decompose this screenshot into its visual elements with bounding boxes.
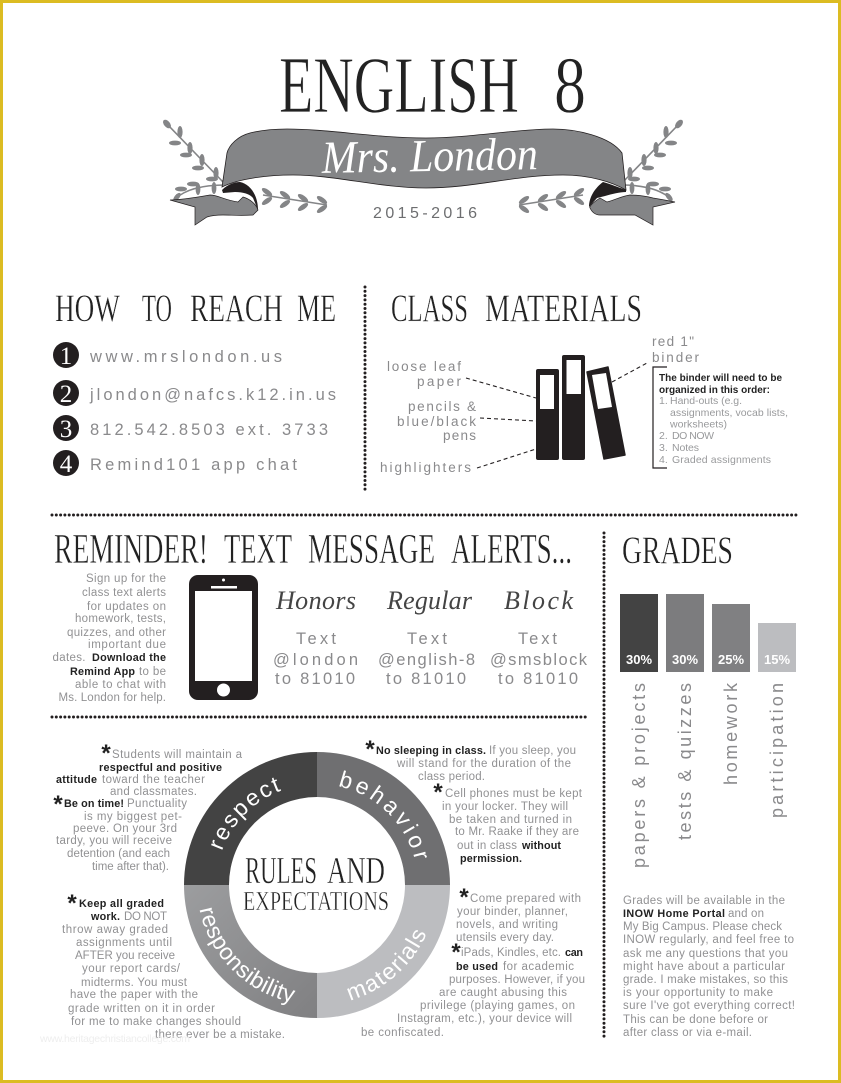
vertical divider between contact and materials <box>364 287 366 493</box>
class: block: @smsblock <box>490 651 588 669</box>
rule: no sleeping: No sleeping in class. <box>376 745 486 757</box>
rule: keep graded work: DO NOT <box>124 911 167 923</box>
rule: keep graded work: your report cards/ <box>82 963 181 975</box>
grades note: is your opportunity to make <box>623 987 773 999</box>
materials labels: paper <box>417 374 462 389</box>
binder organization note: Graded assignments <box>672 454 771 466</box>
rule: devices: Instagram, etc.), your device will <box>397 1013 572 1025</box>
rule: keep graded work: grade written on it in order <box>68 1003 215 1015</box>
watermark: www.heritagechristiancollege.com <box>39 1033 190 1045</box>
rule: respect <box>56 740 243 798</box>
binder organization note: The binder will need to be <box>659 373 782 384</box>
rule: cell phones: permission. <box>460 853 522 865</box>
rule: come prepared: * <box>459 884 469 911</box>
grades note: INOW Home Portal <box>623 908 725 920</box>
rule: keep graded work: AFTER you receive <box>75 950 175 962</box>
bar: papers and projects: 30% <box>626 652 652 667</box>
banner name: Mrs. London <box>320 128 538 183</box>
sign-up paragraph: dates. <box>52 652 86 664</box>
materials labels: red 1" <box>652 334 694 349</box>
heading: how to reach me: ME <box>297 287 336 330</box>
rule: be on time: Be on time! <box>64 798 124 810</box>
rule: come prepared: your binder, planner, <box>457 906 568 918</box>
sign-up paragraph: Sign up for the <box>86 573 166 585</box>
rule: be on time <box>53 791 187 873</box>
heading: text message alerts <box>54 527 572 573</box>
rule: keep graded work: there ever be a mistake. <box>155 1029 285 1041</box>
class: block <box>490 586 588 688</box>
class: block: to 81010 <box>498 670 578 688</box>
app chat: Remind101 app chat <box>90 456 297 474</box>
rule: cell phones: be taken and turned in <box>449 814 572 826</box>
segment: respect: respect <box>211 778 282 850</box>
rule: keep graded work: assignments until <box>76 937 172 949</box>
segment: materials <box>317 885 450 1018</box>
heading: how to reach me: REACH <box>190 287 283 330</box>
number 3: 3 <box>60 416 72 443</box>
class: regular: Text <box>407 630 447 648</box>
rule: be on time: is my biggest pet- <box>84 811 182 823</box>
donut title: RULES <box>245 850 317 892</box>
axis labels: participation <box>767 683 787 818</box>
rule: keep graded work: Keep all graded <box>79 898 164 910</box>
class: honors: @london <box>273 651 358 669</box>
segment: respect <box>184 752 317 885</box>
phone: 812.542.8503 ext. 3733 <box>90 421 328 439</box>
rule: come prepared: Come prepared with <box>470 893 581 905</box>
rule: come prepared: utensils every day. <box>456 932 554 944</box>
rule: be on time: Punctuality <box>127 798 187 810</box>
rule: devices: for academic <box>503 961 574 973</box>
binder organization note <box>653 367 788 468</box>
rule: respect: and classmates. <box>110 786 197 798</box>
number 4: 4 <box>60 451 73 478</box>
grades note: My Big Campus. Please check <box>623 921 782 933</box>
rule: respect: * <box>101 740 111 767</box>
sign-up paragraph: Download the <box>92 652 166 664</box>
bar: homework <box>712 604 750 672</box>
heading: grades: GRADES <box>622 529 733 572</box>
class: regular <box>378 586 475 688</box>
rule: cell phones <box>433 779 583 865</box>
grades note: grade. I make mistakes, so this <box>623 974 788 986</box>
rule: devices: be used <box>456 961 498 973</box>
heading: text message alerts: MESSAGE <box>308 527 435 573</box>
school year: 2015-2016 <box>373 205 477 222</box>
sign-up paragraph: able to chat with <box>75 679 166 691</box>
sign-up paragraph: quizzes, and other <box>67 627 166 639</box>
grades note: sure I've got everything correct! <box>623 1000 795 1012</box>
binder organization note: worksheets) <box>669 418 727 430</box>
segment: behavior: behavior <box>339 770 427 858</box>
materials labels: binder <box>652 350 700 365</box>
sign-up paragraph <box>52 573 166 704</box>
rule: devices: are caught abusing this <box>439 987 567 999</box>
grades note: might have about a particular <box>623 961 785 973</box>
class: regular: @english-8 <box>378 651 475 669</box>
class: block: Text <box>518 630 557 648</box>
binder organization note: 3. <box>659 442 668 454</box>
class: block: Block <box>504 586 573 615</box>
segment: responsibility <box>184 885 317 1018</box>
materials labels: loose leaf <box>387 359 461 374</box>
rule: cell phones: without <box>521 840 561 852</box>
number 2: 2 <box>60 381 72 408</box>
class: honors: Honors <box>275 586 356 615</box>
donut title: AND <box>327 850 385 892</box>
rule: cell phones: out in class <box>457 840 517 852</box>
number 2 <box>53 380 79 408</box>
title: 8 <box>554 42 586 130</box>
bar: participation: 15% <box>764 652 790 667</box>
sign-up paragraph: Ms. London for help. <box>58 692 166 704</box>
bar: tests and quizzes: 30% <box>672 652 698 667</box>
number 1: 1 <box>60 343 72 370</box>
title: ENGLISH <box>279 42 519 130</box>
bar: participation <box>758 623 796 672</box>
binder organization note: Hand-outs (e.g. <box>670 395 742 407</box>
rule: come prepared: novels, and writing <box>456 919 558 931</box>
segment: responsibility: responsibility <box>200 908 296 1005</box>
dashed leader lines <box>466 363 647 468</box>
rule: cell phones: Cell phones must be kept <box>445 788 583 800</box>
class: regular: Regular <box>386 586 473 615</box>
materials labels: pens <box>443 428 476 443</box>
number 4 <box>53 450 79 478</box>
heading: class materials <box>391 287 642 330</box>
class: regular: to 81010 <box>386 670 466 688</box>
contact list <box>53 342 336 478</box>
email: jlondon@nafcs.k12.in.us <box>89 386 336 404</box>
right laurel branches <box>518 118 685 214</box>
heading: how to reach me: TO <box>142 287 172 330</box>
rule: no sleeping: will stand for the duration of the <box>396 758 571 770</box>
left laurel branches <box>161 118 328 214</box>
rule: keep graded work: midterms. You must <box>81 977 188 989</box>
rule: respect: toward the teacher <box>102 774 205 786</box>
binder organization note: Notes <box>672 442 699 454</box>
grades note: INOW regularly, and feel free to <box>623 934 794 946</box>
bar: homework: 25% <box>718 652 744 667</box>
rule: keep graded work: * <box>67 890 77 917</box>
class: honors: Text <box>296 630 336 648</box>
heading: class materials: CLASS <box>391 287 468 330</box>
rule: devices: can <box>565 947 583 959</box>
rule: come prepared <box>456 884 581 944</box>
heading: how to reach me <box>55 287 336 330</box>
rule: respect: attitude <box>56 774 97 786</box>
class: honors: to 81010 <box>275 670 355 688</box>
rule: be on time: time after that). <box>92 861 169 873</box>
donut title: EXPECTATIONS <box>243 886 389 916</box>
grades note: This can be done before or <box>623 1014 768 1026</box>
bar: tests and quizzes <box>666 594 704 672</box>
materials labels: highlighters <box>380 460 471 475</box>
rule: cell phones: to Mr. Raake if they are <box>455 826 579 838</box>
heading: text message alerts: ALERTS... <box>451 527 572 573</box>
heading: class materials: MATERIALS <box>485 287 642 330</box>
rule: be on time: peeve. On your 3rd <box>73 823 177 835</box>
class: honors <box>273 586 358 688</box>
sign-up paragraph: for updates on <box>87 601 166 613</box>
rule: be on time: * <box>53 791 63 818</box>
sign-up paragraph: homework, tests, <box>75 613 166 625</box>
binder organization note: assignments, vocab lists, <box>670 407 788 419</box>
rule: devices <box>361 939 585 1039</box>
rule: no sleeping: * <box>365 736 375 763</box>
rule: keep graded work: throw away graded <box>62 924 168 936</box>
rule: devices: be confiscated. <box>361 1027 444 1039</box>
rule: cell phones: * <box>433 779 443 806</box>
website: www.mrslondon.us <box>89 348 282 366</box>
rule: respect: respectful and positive <box>99 762 222 774</box>
number 1 <box>53 342 79 370</box>
sign-up paragraph: to be <box>139 666 166 678</box>
grades note: after class or via e-mail. <box>623 1027 752 1039</box>
rule: no sleeping <box>365 736 576 783</box>
axis labels: tests & quizzes <box>675 683 695 840</box>
rule: be on time: tardy, you will receive <box>56 835 172 847</box>
bar chart: grade weights <box>620 594 796 868</box>
rule: devices: purposes. However, if you <box>449 974 585 986</box>
materials labels <box>380 334 700 475</box>
rule: keep graded work: have the paper with the <box>70 989 198 1001</box>
axis labels <box>629 682 787 868</box>
sign-up paragraph: class text alerts <box>82 587 166 599</box>
grades note: Grades will be available in the <box>623 895 785 907</box>
rule: devices: * <box>451 939 461 966</box>
rule: devices: privilege (playing games, on <box>420 1000 575 1012</box>
rule: keep graded work <box>62 890 285 1041</box>
binder organization note: 2. <box>659 430 668 442</box>
segment: materials: materials <box>347 930 426 1000</box>
binder organization note: 4. <box>659 454 668 466</box>
rule: cell phones: in your locker. They will <box>442 801 568 813</box>
grades note: ask me any questions that you <box>623 948 788 960</box>
rule: devices: iPads, Kindles, etc. <box>461 947 561 959</box>
number 3 <box>53 415 79 443</box>
donut title <box>243 850 389 916</box>
binder organization note: organized in this order: <box>659 385 770 396</box>
heading: how to reach me: HOW <box>55 287 120 330</box>
binder organization note: DO NOW <box>672 430 714 442</box>
segment: behavior <box>317 752 450 885</box>
donut: rules and expectations <box>184 752 450 1018</box>
rule: no sleeping: class period. <box>418 771 485 783</box>
sign-up paragraph: important due <box>88 639 166 651</box>
binder organization note: 1. <box>659 395 668 407</box>
icon: smartphone <box>189 575 258 700</box>
materials labels: blue/black <box>397 414 476 429</box>
grades note: and on <box>728 908 764 920</box>
rule: no sleeping: If you sleep, you <box>489 745 576 757</box>
sign-up paragraph: Remind App <box>70 666 135 678</box>
rule: keep graded work: work. <box>90 911 120 923</box>
axis labels: papers & projects <box>629 683 649 868</box>
heading: text message alerts: TEXT <box>224 527 292 573</box>
heading: text message alerts: REMINDER! <box>54 527 208 573</box>
bar: papers and projects <box>620 594 658 672</box>
rule: respect: Students will maintain a <box>112 749 243 761</box>
materials labels: pencils & <box>408 399 476 414</box>
icon: binders <box>536 355 625 460</box>
rule: be on time: detention (and each <box>67 848 170 860</box>
ribbon banner <box>170 128 675 225</box>
rule: keep graded work: for me to make changes should <box>71 1016 241 1028</box>
grades note <box>623 895 795 1039</box>
axis labels: homework <box>721 682 741 785</box>
